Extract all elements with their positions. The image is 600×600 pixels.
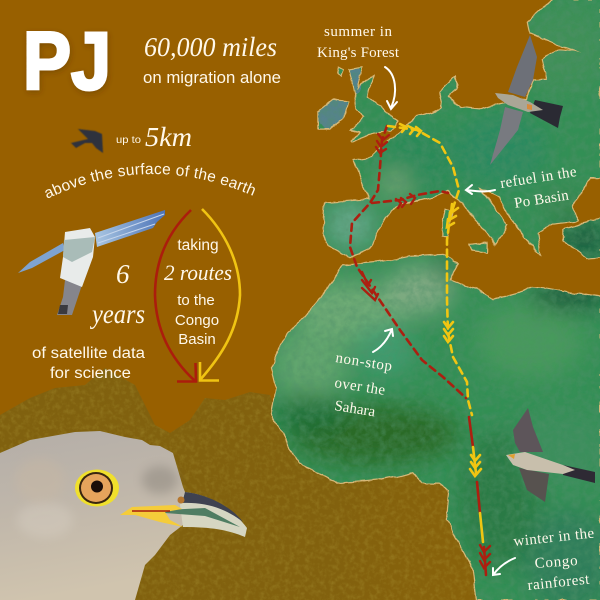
title: PJ: PJ	[23, 16, 111, 107]
icon: cuckoo flying over Europe	[490, 35, 563, 165]
text: taking 2 routes to the Congo Basin	[164, 237, 232, 348]
map coastline glow	[272, 0, 600, 600]
head and plumage	[0, 431, 185, 600]
annotation: refuel in the Po Basin	[466, 164, 578, 212]
text: taking 2 routes to the Congo Basin: Basin	[178, 331, 216, 348]
yellow migration route	[388, 124, 483, 542]
stat caption: on migration alone: on migration alone	[143, 68, 281, 87]
annotation: non-stop over the Sahara: Sahara	[333, 398, 377, 420]
icon: cuckoo flying over Africa	[506, 408, 595, 502]
label: up to: up to	[116, 135, 141, 146]
land textures	[272, 0, 600, 600]
annotation: summer in King's Forest: King's Forest	[317, 45, 400, 61]
caption: of satellite data for science	[32, 345, 145, 382]
arrow: yellow route arc	[200, 209, 240, 380]
red migration route	[350, 126, 490, 575]
icon: satellite	[18, 210, 165, 315]
stat: 6 years: 6	[116, 259, 130, 289]
caption: of satellite data for science: for science	[50, 365, 131, 382]
stat: 5km: 5km	[145, 122, 192, 152]
map of Europe and Africa	[270, 0, 600, 600]
yellow chevrons	[400, 124, 481, 476]
annotation: non-stop over the Sahara: non-stop	[334, 350, 393, 375]
text: taking 2 routes to the Congo Basin: 2 routes	[164, 260, 232, 285]
text: taking 2 routes to the Congo Basin: taking	[177, 237, 219, 254]
stat: 6 years: years	[89, 299, 145, 329]
annotation: winter in the Congo rainforest: rainforest	[527, 571, 591, 594]
annotation: winter in the Congo rainforest	[493, 526, 595, 594]
text: taking 2 routes to the Congo Basin: to the	[177, 292, 215, 309]
caption: of satellite data for science: of satellite data	[32, 345, 145, 362]
annotation: refuel in the Po Basin: refuel in the	[499, 164, 578, 192]
curved caption: above the surface of the earth: above the surface of the earth	[45, 163, 255, 198]
stat: 60,000 miles: 60,000 miles	[144, 32, 277, 62]
arrow: red route arc	[155, 210, 196, 382]
annotation: refuel in the Po Basin: Po Basin	[513, 187, 570, 212]
eye	[75, 470, 119, 506]
annotation: non-stop over the Sahara	[333, 329, 393, 420]
annotation: winter in the Congo rainforest: winter in the	[513, 526, 595, 550]
icon: small bird silhouette	[71, 129, 103, 153]
forest silhouette behind the cuckoo head	[0, 368, 476, 600]
cuckoo head portrait	[0, 431, 247, 600]
annotation: winter in the Congo rainforest: Congo	[534, 553, 578, 572]
annotation: summer in King's Forest	[317, 24, 400, 109]
beak	[180, 492, 247, 537]
red chevrons	[362, 134, 490, 568]
text: taking 2 routes to the Congo Basin: Congo	[175, 312, 219, 329]
stat: 6 years	[89, 259, 145, 329]
annotation: summer in King's Forest: summer in	[324, 24, 392, 40]
annotation: non-stop over the Sahara: over the	[333, 375, 387, 399]
